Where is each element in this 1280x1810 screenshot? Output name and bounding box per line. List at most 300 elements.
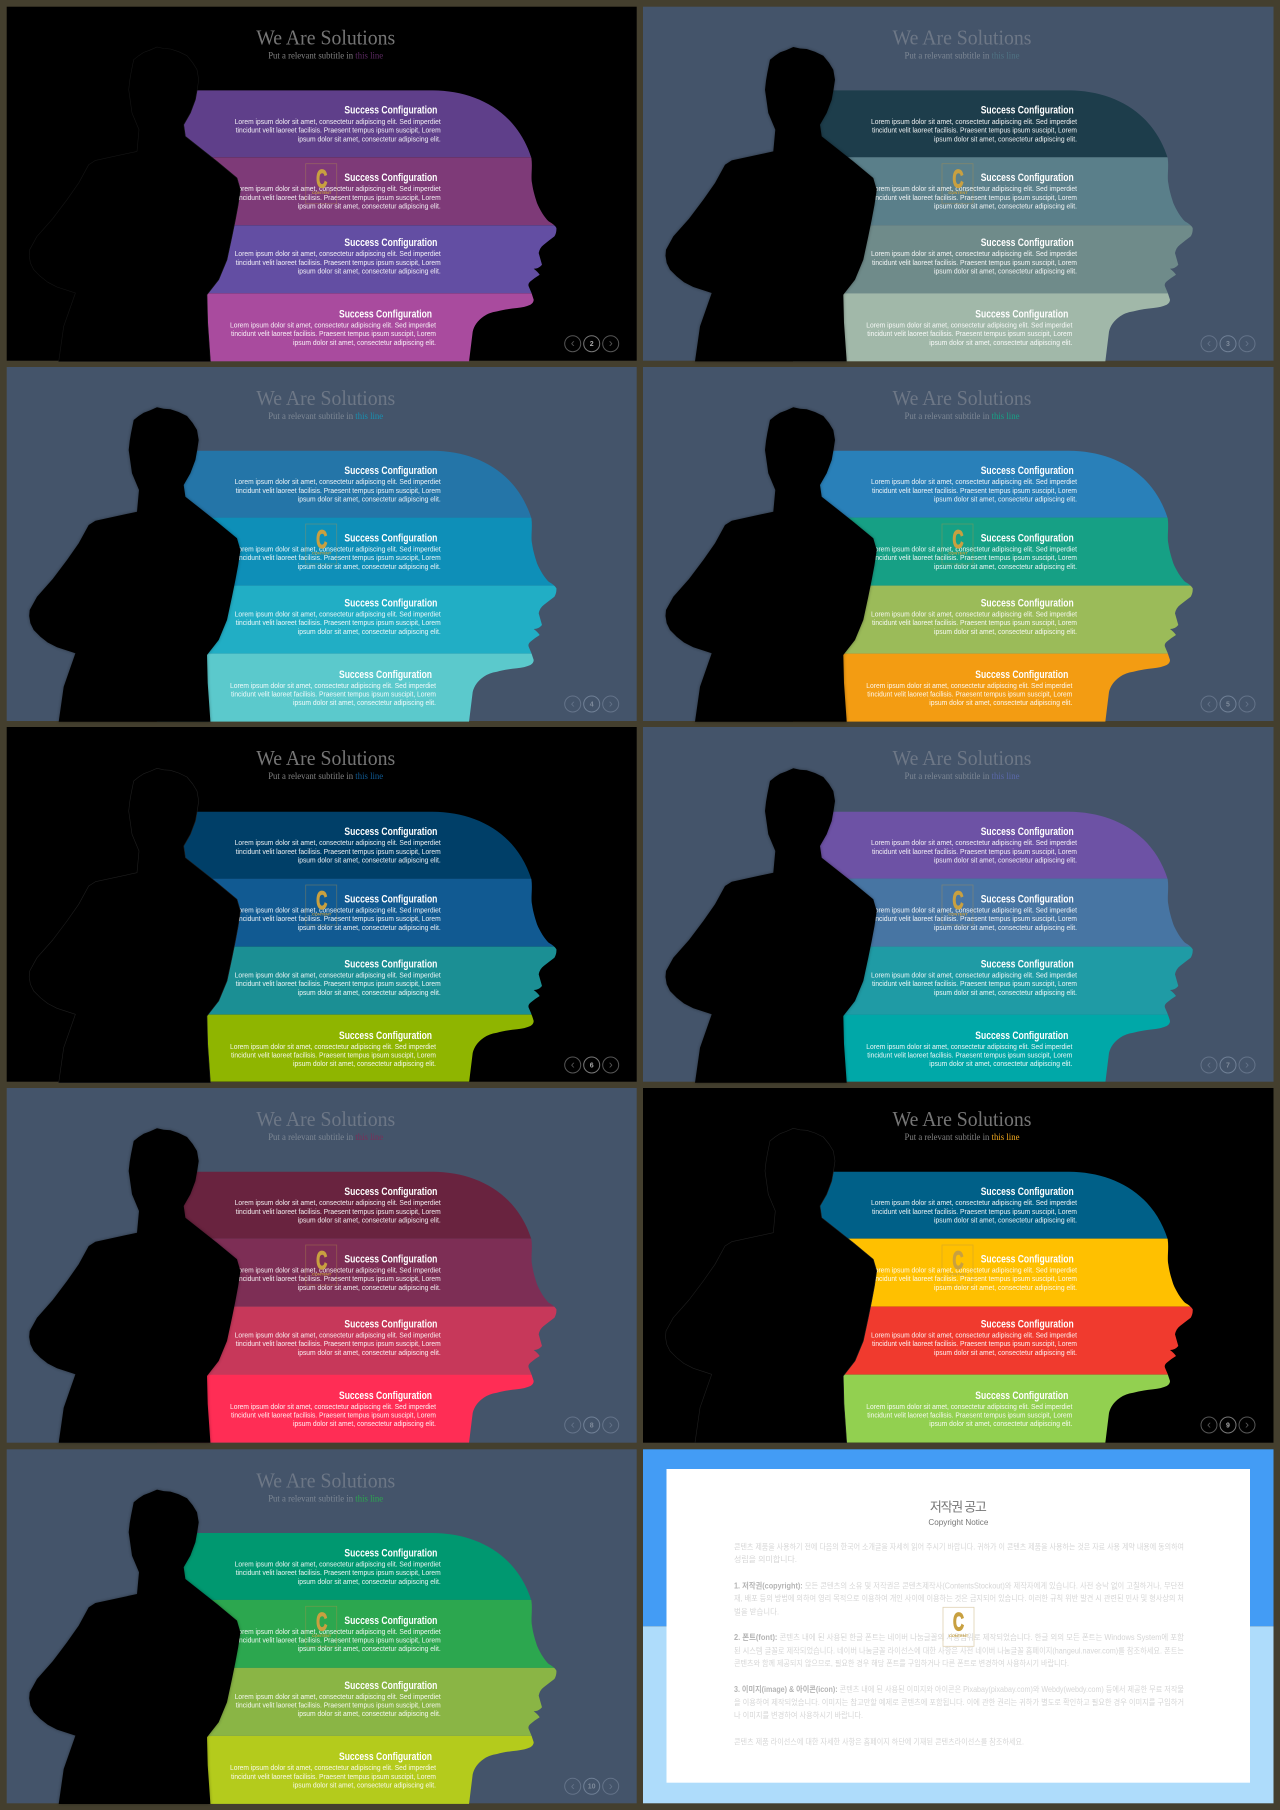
text band 3: Lorem ipsum dolor sit amet, consectetur adipiscing elit. Sed imperdiet bbox=[871, 1330, 1078, 1340]
text band 3 bbox=[235, 958, 441, 997]
text band 1: ipsum dolor sit amet, consectetur adipiscing elit. bbox=[298, 1216, 441, 1225]
text band 3: ipsum dolor sit amet, consectetur adipiscing elit. bbox=[934, 988, 1077, 997]
text band 2: ipsum dolor sit amet, consectetur adipiscing elit. bbox=[298, 923, 441, 932]
copyright body text: 성립을 의미합니다. bbox=[734, 1554, 797, 1564]
text band 1: ipsum dolor sit amet, consectetur adipiscing elit. bbox=[934, 1216, 1077, 1225]
title: We Are Solutions bbox=[892, 1107, 1032, 1131]
pagination bbox=[565, 1778, 619, 1794]
man silhouette bbox=[666, 47, 877, 361]
text band 3: Lorem ipsum dolor sit amet, consectetur adipiscing elit. Sed imperdiet bbox=[235, 1692, 441, 1701]
text band 4: tincidunt velit laoreet facilisis. Praesent tempus ipsum suscipit, Lorem bbox=[231, 1772, 436, 1781]
title: We Are Solutions bbox=[892, 386, 1032, 410]
text band 2: Lorem ipsum dolor sit amet, consectetur adipiscing elit. Sed imperdiet bbox=[871, 184, 1078, 193]
title: We Are Solutions bbox=[256, 1468, 395, 1492]
text band 2: Lorem ipsum dolor sit amet, consectetur adipiscing elit. Sed imperdiet bbox=[871, 1266, 1078, 1274]
text band 3: Success Configuration bbox=[344, 237, 437, 249]
text band 3: tincidunt velit laoreet facilisis. Praesent tempus ipsum suscipit, Lorem bbox=[872, 979, 1077, 988]
pagination bbox=[565, 1417, 619, 1433]
text band 4: Success Configuration bbox=[339, 1751, 432, 1763]
pagination: ‹ bbox=[571, 696, 575, 710]
text band 2: Lorem ipsum dolor sit amet, consectetur adipiscing elit. Sed imperdiet bbox=[235, 1627, 441, 1636]
copyright body text: 2. 폰트(font): 콘텐츠 내에 된 사용된 한글 폰트는 네이버 나눔글꼴의 사용범위로 제작되었습니다. 한글 외의 모든 폰트는 Windows System에 포함 bbox=[734, 1632, 1185, 1642]
watermark: CONTENT bbox=[948, 190, 968, 195]
watermark: CONTENT bbox=[949, 1633, 969, 1638]
text band 2 bbox=[871, 1254, 1078, 1292]
man silhouette bbox=[29, 768, 240, 1083]
text band 4 bbox=[230, 308, 437, 347]
copyright body text: 된 시스템 글꼴로 제작되었습니다. 네이버 나눔글꼴 라이선스에 대한 사항은 사전 네이버 나눔글꼴 홈페이지(hangeul.naver.com)를 참조하세요. 폰트는 bbox=[734, 1646, 1184, 1656]
pagination: ‹ bbox=[1207, 696, 1211, 710]
panel: slide 5 blue green orange on slate bbox=[643, 367, 1274, 722]
panel: slide 4 blues on slate bbox=[7, 367, 637, 722]
text band 3: Success Configuration bbox=[981, 237, 1074, 249]
watermark bbox=[942, 524, 973, 564]
text band 3: Success Configuration bbox=[344, 1680, 437, 1692]
text band 1: tincidunt velit laoreet facilisis. Praesent tempus ipsum suscipit, Lorem bbox=[872, 486, 1077, 495]
text band 2 bbox=[235, 1615, 441, 1653]
text band 4: Success Configuration bbox=[975, 1390, 1068, 1402]
text band 3: ipsum dolor sit amet, consectetur adipiscing elit. bbox=[298, 988, 441, 997]
panel: slide 2 purple on black bbox=[7, 7, 637, 361]
pagination: › bbox=[1245, 1058, 1249, 1072]
title: We Are Solutions bbox=[892, 26, 1032, 50]
man silhouette bbox=[29, 1490, 240, 1804]
pagination: 10 bbox=[588, 1784, 596, 1791]
text band 2: ipsum dolor sit amet, consectetur adipiscing elit. bbox=[934, 562, 1077, 571]
text band 2: ipsum dolor sit amet, consectetur adipiscing elit. bbox=[934, 923, 1077, 932]
title: We Are Solutions bbox=[256, 746, 395, 770]
text band 1: ipsum dolor sit amet, consectetur adipiscing elit. bbox=[934, 134, 1077, 143]
text band 4: tincidunt velit laoreet facilisis. Praesent tempus ipsum suscipit, Lorem bbox=[867, 1410, 1072, 1419]
text band 1 bbox=[235, 465, 441, 504]
head infographic bbox=[157, 90, 567, 361]
watermark bbox=[306, 524, 337, 564]
subtitle: Put a relevant subtitle in this line bbox=[268, 412, 383, 422]
text band 3: Lorem ipsum dolor sit amet, consectetur adipiscing elit. Sed imperdiet bbox=[235, 610, 441, 618]
text band 4: Lorem ipsum dolor sit amet, consectetur adipiscing elit. Sed imperdiet bbox=[866, 1042, 1073, 1051]
title: We Are Solutions bbox=[256, 386, 395, 410]
pagination: 3 bbox=[1226, 341, 1230, 348]
text band 4: tincidunt velit laoreet facilisis. Praesent tempus ipsum suscipit, Lorem bbox=[231, 1050, 436, 1059]
text band 4: Lorem ipsum dolor sit amet, consectetur adipiscing elit. Sed imperdiet bbox=[866, 1402, 1073, 1411]
pagination bbox=[1201, 1057, 1255, 1073]
man silhouette bbox=[29, 47, 240, 361]
text band 2: Success Configuration bbox=[981, 172, 1074, 184]
text band 3 bbox=[871, 237, 1078, 276]
title: We Are Solutions bbox=[892, 746, 1032, 770]
watermark: C bbox=[316, 1608, 327, 1636]
text band 3: tincidunt velit laoreet facilisis. Praesent tempus ipsum suscipit, Lorem bbox=[872, 258, 1077, 267]
text band 3: Success Configuration bbox=[981, 1318, 1074, 1330]
subtitle: Put a relevant subtitle in this line bbox=[268, 1494, 383, 1504]
panel: slide 7 violet teal on slate bbox=[643, 727, 1274, 1083]
text band 4: Lorem ipsum dolor sit amet, consectetur adipiscing elit. Sed imperdiet bbox=[230, 1402, 437, 1411]
title: We Are Solutions bbox=[256, 1107, 395, 1131]
text band 1: Lorem ipsum dolor sit amet, consectetur adipiscing elit. Sed imperdiet bbox=[871, 1198, 1078, 1207]
text band 4: Success Configuration bbox=[975, 669, 1068, 681]
text band 1: tincidunt velit laoreet facilisis. Praesent tempus ipsum suscipit, Lorem bbox=[872, 126, 1077, 135]
pagination: ‹ bbox=[1207, 1058, 1211, 1072]
text band 2: tincidunt velit laoreet facilisis. Praesent tempus ipsum suscipit, Lorem bbox=[872, 193, 1077, 202]
text band 3: Lorem ipsum dolor sit amet, consectetur adipiscing elit. Sed imperdiet bbox=[235, 249, 441, 258]
text band 3 bbox=[235, 598, 441, 636]
pagination: ‹ bbox=[1207, 1418, 1211, 1432]
head infographic bbox=[157, 811, 567, 1082]
text band 4: ipsum dolor sit amet, consectetur adipiscing elit. bbox=[929, 338, 1072, 347]
pagination: 2 bbox=[590, 341, 594, 348]
text band 2: tincidunt velit laoreet facilisis. Praesent tempus ipsum suscipit, Lorem bbox=[236, 553, 441, 562]
watermark: C bbox=[316, 887, 327, 915]
head infographic bbox=[157, 1171, 567, 1443]
text band 1: Success Configuration bbox=[344, 465, 437, 477]
pagination bbox=[565, 336, 619, 352]
text band 2: Lorem ipsum dolor sit amet, consectetur adipiscing elit. Sed imperdiet bbox=[235, 906, 441, 914]
text band 2 bbox=[871, 532, 1078, 571]
text band 2: tincidunt velit laoreet facilisis. Praesent tempus ipsum suscipit, Lorem bbox=[872, 553, 1077, 562]
text band 1: Lorem ipsum dolor sit amet, consectetur adipiscing elit. Sed imperdiet bbox=[235, 117, 441, 126]
watermark: C bbox=[952, 526, 964, 554]
text band 3: Success Configuration bbox=[344, 598, 437, 610]
copyright body text: 을 이용하여 제작되었습니다. 이미지는 참고만할 예제로 콘텐츠에 포함됩니다. 이에 관한 권리는 귀하가 별도로 확인하고 필요한 경우 이미지를 구입하거 bbox=[734, 1697, 1184, 1707]
pagination: › bbox=[1245, 696, 1249, 710]
watermark: CONTENT bbox=[312, 550, 332, 556]
pagination bbox=[565, 696, 619, 712]
text band 3 bbox=[871, 598, 1078, 636]
watermark bbox=[306, 1245, 337, 1285]
subtitle: Put a relevant subtitle in this line bbox=[904, 772, 1020, 782]
head infographic bbox=[793, 811, 1203, 1082]
text band 2: ipsum dolor sit amet, consectetur adipiscing elit. bbox=[298, 202, 441, 211]
text band 1: Success Configuration bbox=[344, 105, 437, 117]
pagination: 4 bbox=[590, 701, 594, 708]
text band 4 bbox=[866, 308, 1073, 347]
text band 2: Success Configuration bbox=[344, 172, 437, 184]
text band 1: Lorem ipsum dolor sit amet, consectetur adipiscing elit. Sed imperdiet bbox=[871, 838, 1078, 847]
panel: slide 9 multicolor on black bbox=[643, 1088, 1274, 1443]
pagination bbox=[1201, 336, 1255, 352]
watermark: CONTENT bbox=[948, 1272, 968, 1276]
text band 2 bbox=[871, 894, 1078, 932]
text band 4: Success Configuration bbox=[975, 1030, 1068, 1042]
text band 3: tincidunt velit laoreet facilisis. Praesent tempus ipsum suscipit, Lorem bbox=[236, 258, 441, 267]
copyright body text: 벌을 받습니다. bbox=[734, 1606, 779, 1616]
head infographic bbox=[793, 1171, 1203, 1443]
pagination: ‹ bbox=[571, 1058, 575, 1072]
text band 3: ipsum dolor sit amet, consectetur adipiscing elit. bbox=[934, 1348, 1077, 1357]
copyright body text: 콘텐츠 제품 라이선스에 대한 자세한 사항은 홈페이지 하단에 기재된 콘텐츠라이선스를 참조하세요. bbox=[734, 1736, 1024, 1746]
text band 4 bbox=[230, 1030, 437, 1068]
text band 4: tincidunt velit laoreet facilisis. Praesent tempus ipsum suscipit, Lorem bbox=[867, 1050, 1072, 1059]
text band 3 bbox=[871, 958, 1078, 997]
text band 4 bbox=[230, 669, 437, 707]
text band 4: tincidunt velit laoreet facilisis. Praesent tempus ipsum suscipit, Lorem bbox=[867, 329, 1072, 338]
text band 4: Lorem ipsum dolor sit amet, consectetur adipiscing elit. Sed imperdiet bbox=[230, 1042, 437, 1051]
text band 2: tincidunt velit laoreet facilisis. Praesent tempus ipsum suscipit, Lorem bbox=[236, 1636, 441, 1645]
watermark: C bbox=[952, 1247, 964, 1275]
watermark: CONTENT bbox=[312, 912, 332, 916]
man silhouette bbox=[666, 1128, 877, 1443]
text band 2: Lorem ipsum dolor sit amet, consectetur adipiscing elit. Sed imperdiet bbox=[235, 1266, 441, 1274]
subtitle: Put a relevant subtitle in this line bbox=[904, 52, 1020, 62]
watermark bbox=[943, 1607, 974, 1646]
panel: slide 6 navy lime on black bbox=[7, 727, 637, 1083]
text band 3 bbox=[871, 1318, 1078, 1357]
pagination: 9 bbox=[1226, 1422, 1230, 1429]
head infographic bbox=[157, 450, 567, 722]
pagination: › bbox=[609, 1058, 613, 1072]
text band 2: Success Configuration bbox=[344, 532, 437, 544]
copyright body text bbox=[734, 1542, 1185, 1746]
text band 4: ipsum dolor sit amet, consectetur adipiscing elit. bbox=[929, 1059, 1072, 1068]
text band 3: ipsum dolor sit amet, consectetur adipiscing elit. bbox=[298, 1709, 441, 1718]
text band 1: Success Configuration bbox=[981, 105, 1074, 117]
watermark: C bbox=[953, 1608, 964, 1636]
subtitle: Put a relevant subtitle in this line bbox=[268, 1133, 383, 1143]
text band 1: ipsum dolor sit amet, consectetur adipiscing elit. bbox=[298, 495, 441, 504]
pagination: › bbox=[609, 1779, 613, 1793]
head infographic bbox=[793, 90, 1203, 361]
pagination: 8 bbox=[590, 1422, 594, 1429]
text band 3 bbox=[235, 1318, 441, 1357]
text band 2: ipsum dolor sit amet, consectetur adipiscing elit. bbox=[298, 562, 441, 571]
man silhouette bbox=[29, 407, 240, 722]
text band 4: ipsum dolor sit amet, consectetur adipiscing elit. bbox=[929, 1419, 1072, 1428]
text band 1 bbox=[871, 826, 1078, 865]
subtitle: Put a relevant subtitle in this line bbox=[904, 1133, 1020, 1143]
text band 2: Success Configuration bbox=[981, 894, 1074, 906]
text band 1 bbox=[235, 1547, 441, 1586]
text band 3 bbox=[235, 237, 441, 276]
watermark: C bbox=[316, 526, 327, 554]
man silhouette bbox=[666, 407, 877, 722]
text band 3: Lorem ipsum dolor sit amet, consectetur adipiscing elit. Sed imperdiet bbox=[235, 1330, 441, 1340]
text band 1: Success Configuration bbox=[344, 1186, 437, 1198]
text band 4: Lorem ipsum dolor sit amet, consectetur adipiscing elit. Sed imperdiet bbox=[230, 1763, 437, 1772]
text band 4 bbox=[866, 669, 1073, 707]
copyright body text: 3. 이미지(image) & 아이콘(icon): 콘텐츠 내에 된 사용된 이미지와 아이콘은 Pixabay(pixabay.com)와 Webdy(webdy.com) 등에서 제공한 무료 저작물 bbox=[734, 1684, 1184, 1694]
pagination bbox=[1201, 696, 1255, 712]
panel: copyright notice bbox=[643, 1449, 1274, 1803]
text band 2: Success Configuration bbox=[344, 1254, 437, 1266]
watermark: CONTENT bbox=[948, 912, 968, 916]
watermark: CONTENT bbox=[312, 1272, 332, 1276]
watermark: C bbox=[316, 1247, 327, 1275]
subtitle: Put a relevant subtitle in this line bbox=[268, 772, 383, 782]
text band 4: ipsum dolor sit amet, consectetur adipiscing elit. bbox=[293, 1781, 436, 1790]
text band 3: Success Configuration bbox=[344, 1318, 437, 1330]
text band 4: Lorem ipsum dolor sit amet, consectetur adipiscing elit. Sed imperdiet bbox=[230, 320, 437, 329]
text band 3 bbox=[235, 1680, 441, 1718]
text band 1: ipsum dolor sit amet, consectetur adipiscing elit. bbox=[298, 856, 441, 865]
title: We Are Solutions bbox=[256, 26, 395, 50]
text band 2: Success Configuration bbox=[981, 532, 1074, 544]
watermark bbox=[306, 164, 337, 204]
text band 4: Lorem ipsum dolor sit amet, consectetur adipiscing elit. Sed imperdiet bbox=[230, 681, 437, 690]
text band 2: tincidunt velit laoreet facilisis. Praesent tempus ipsum suscipit, Lorem bbox=[236, 914, 441, 923]
text band 1: Success Configuration bbox=[344, 826, 437, 838]
pagination: › bbox=[609, 1418, 613, 1432]
text band 3: ipsum dolor sit amet, consectetur adipiscing elit. bbox=[298, 1348, 441, 1357]
watermark: CONTENT bbox=[312, 190, 332, 195]
text band 3: ipsum dolor sit amet, consectetur adipiscing elit. bbox=[934, 627, 1077, 636]
text band 3: Lorem ipsum dolor sit amet, consectetur adipiscing elit. Sed imperdiet bbox=[871, 610, 1078, 618]
text band 4: tincidunt velit laoreet facilisis. Praesent tempus ipsum suscipit, Lorem bbox=[231, 689, 436, 698]
text band 4: Lorem ipsum dolor sit amet, consectetur adipiscing elit. Sed imperdiet bbox=[866, 681, 1073, 690]
watermark bbox=[306, 885, 337, 925]
text band 2 bbox=[871, 172, 1078, 211]
panel: slide 3 teal-grey on slate bbox=[643, 7, 1274, 361]
text band 1: tincidunt velit laoreet facilisis. Praesent tempus ipsum suscipit, Lorem bbox=[236, 847, 441, 856]
text band 3: ipsum dolor sit amet, consectetur adipiscing elit. bbox=[934, 267, 1077, 276]
text band 1: ipsum dolor sit amet, consectetur adipiscing elit. bbox=[934, 495, 1077, 504]
text band 2: Success Configuration bbox=[981, 1254, 1074, 1266]
panel: slide 8 maroon red on slate bbox=[7, 1088, 637, 1443]
text band 3: Success Configuration bbox=[981, 598, 1074, 610]
copyright body text: 재, 배포 등의 방법에 의하여 영리 목적으로 이용하여 개인 사이에 이용하는 것은 금지되어 있습니다. 이러한 규칙 위반 발견 시 관련된 민사 및 형사상의 처 bbox=[734, 1593, 1184, 1603]
text band 1: Lorem ipsum dolor sit amet, consectetur adipiscing elit. Sed imperdiet bbox=[235, 1560, 441, 1569]
text band 3: Success Configuration bbox=[344, 958, 437, 970]
watermark bbox=[942, 164, 973, 204]
text band 4: Success Configuration bbox=[975, 308, 1068, 320]
text band 3: tincidunt velit laoreet facilisis. Praesent tempus ipsum suscipit, Lorem bbox=[236, 1701, 441, 1710]
pagination: › bbox=[1245, 336, 1249, 350]
watermark: C bbox=[952, 166, 964, 194]
text band 2: Lorem ipsum dolor sit amet, consectetur adipiscing elit. Sed imperdiet bbox=[871, 906, 1078, 914]
text band 4: tincidunt velit laoreet facilisis. Praesent tempus ipsum suscipit, Lorem bbox=[231, 1410, 436, 1419]
text band 2: ipsum dolor sit amet, consectetur adipiscing elit. bbox=[298, 1283, 441, 1292]
text band 1: ipsum dolor sit amet, consectetur adipiscing elit. bbox=[298, 134, 441, 143]
pagination: ‹ bbox=[571, 1418, 575, 1432]
text band 1: tincidunt velit laoreet facilisis. Praesent tempus ipsum suscipit, Lorem bbox=[236, 1207, 441, 1216]
text band 1: tincidunt velit laoreet facilisis. Praesent tempus ipsum suscipit, Lorem bbox=[236, 126, 441, 135]
text band 2: ipsum dolor sit amet, consectetur adipiscing elit. bbox=[934, 1283, 1077, 1292]
pagination: › bbox=[609, 696, 613, 710]
pagination: › bbox=[1245, 1418, 1249, 1432]
text band 1 bbox=[871, 105, 1078, 143]
copyright body text: 나 이미지를 변경하여 사용하시기 바랍니다. bbox=[734, 1710, 863, 1720]
pagination: ‹ bbox=[571, 1779, 575, 1793]
pagination bbox=[1201, 1417, 1255, 1433]
text band 2: tincidunt velit laoreet facilisis. Praesent tempus ipsum suscipit, Lorem bbox=[872, 914, 1077, 923]
text band 1: Lorem ipsum dolor sit amet, consectetur adipiscing elit. Sed imperdiet bbox=[235, 1198, 441, 1207]
text band 1: ipsum dolor sit amet, consectetur adipiscing elit. bbox=[934, 856, 1077, 865]
subtitle: Put a relevant subtitle in this line bbox=[268, 52, 383, 62]
text band 2: ipsum dolor sit amet, consectetur adipiscing elit. bbox=[298, 1644, 441, 1653]
pagination bbox=[565, 1057, 619, 1073]
text band 4: tincidunt velit laoreet facilisis. Praesent tempus ipsum suscipit, Lorem bbox=[867, 689, 1072, 698]
man silhouette bbox=[666, 768, 877, 1083]
text band 1 bbox=[871, 465, 1078, 504]
watermark bbox=[942, 885, 973, 925]
subtitle: Put a relevant subtitle in this line bbox=[904, 412, 1020, 422]
text band 4: tincidunt velit laoreet facilisis. Praesent tempus ipsum suscipit, Lorem bbox=[231, 329, 436, 338]
copyright body text: 콘텐츠 제품을 사용하기 전에 다음의 한국어 소개글을 자세히 읽어 주시기 바랍니다. 귀하가 이 콘텐츠 제품을 사용하는 것은 자료 사용 계약 내용에 동의하여 bbox=[734, 1542, 1184, 1552]
head infographic bbox=[157, 1532, 567, 1804]
watermark: CONTENT bbox=[312, 1633, 332, 1638]
text band 4: ipsum dolor sit amet, consectetur adipiscing elit. bbox=[293, 1419, 436, 1428]
text band 2: Success Configuration bbox=[344, 894, 437, 906]
pagination: 7 bbox=[1226, 1062, 1230, 1069]
text band 2: Success Configuration bbox=[344, 1615, 437, 1627]
text band 4: Success Configuration bbox=[339, 1390, 432, 1402]
copyright body text: 1. 저작권(copyright): 모든 콘텐츠의 소유 및 저작권은 콘텐츠제작사(ContentsStockout)와 제작자에게 있습니다. 사전 승낙 없이 고칠하거나, 무단전 bbox=[734, 1580, 1184, 1590]
text band 3: tincidunt velit laoreet facilisis. Praesent tempus ipsum suscipit, Lorem bbox=[872, 618, 1077, 627]
copyright body text: 콘텐츠와 함께 제공되지 않으므로, 필요한 경우 해당 폰트를 구입하거나 다른 폰트로 변경하여 사용하시기 바랍니다. bbox=[734, 1658, 1069, 1668]
head infographic bbox=[793, 450, 1203, 722]
panel: slide 10 greens on slate bbox=[7, 1449, 637, 1804]
text band 1 bbox=[871, 1186, 1078, 1225]
pagination: › bbox=[609, 336, 613, 350]
text band 4: ipsum dolor sit amet, consectetur adipiscing elit. bbox=[293, 698, 436, 707]
text band 2: tincidunt velit laoreet facilisis. Praesent tempus ipsum suscipit, Lorem bbox=[236, 193, 441, 202]
text band 1: Lorem ipsum dolor sit amet, consectetur adipiscing elit. Sed imperdiet bbox=[871, 477, 1078, 486]
text band 2 bbox=[235, 894, 441, 932]
text band 4: ipsum dolor sit amet, consectetur adipiscing elit. bbox=[293, 338, 436, 347]
text band 2 bbox=[235, 532, 441, 571]
pagination: 5 bbox=[1226, 701, 1230, 708]
text band 3: ipsum dolor sit amet, consectetur adipiscing elit. bbox=[298, 267, 441, 276]
text band 3: tincidunt velit laoreet facilisis. Praesent tempus ipsum suscipit, Lorem bbox=[872, 1339, 1077, 1348]
text band 1: tincidunt velit laoreet facilisis. Praesent tempus ipsum suscipit, Lorem bbox=[236, 1568, 441, 1577]
text band 1: Lorem ipsum dolor sit amet, consectetur adipiscing elit. Sed imperdiet bbox=[871, 117, 1078, 126]
copyright subheading: Copyright Notice bbox=[928, 1517, 989, 1527]
text band 1 bbox=[235, 105, 441, 143]
text band 1: Lorem ipsum dolor sit amet, consectetur adipiscing elit. Sed imperdiet bbox=[235, 477, 441, 486]
text band 2: tincidunt velit laoreet facilisis. Praesent tempus ipsum suscipit, Lorem bbox=[872, 1274, 1077, 1283]
text band 1: tincidunt velit laoreet facilisis. Praesent tempus ipsum suscipit, Lorem bbox=[236, 486, 441, 495]
text band 4 bbox=[866, 1390, 1073, 1428]
text band 1: Success Configuration bbox=[981, 826, 1074, 838]
text band 3: Lorem ipsum dolor sit amet, consectetur adipiscing elit. Sed imperdiet bbox=[871, 249, 1078, 258]
text band 1: Lorem ipsum dolor sit amet, consectetur adipiscing elit. Sed imperdiet bbox=[235, 838, 441, 847]
text band 2: Lorem ipsum dolor sit amet, consectetur adipiscing elit. Sed imperdiet bbox=[871, 544, 1078, 554]
watermark: C bbox=[952, 887, 964, 915]
text band 4: Lorem ipsum dolor sit amet, consectetur adipiscing elit. Sed imperdiet bbox=[866, 320, 1073, 329]
text band 1 bbox=[235, 1186, 441, 1225]
pagination: 6 bbox=[590, 1062, 594, 1069]
text band 1: ipsum dolor sit amet, consectetur adipiscing elit. bbox=[298, 1577, 441, 1586]
text band 4: ipsum dolor sit amet, consectetur adipiscing elit. bbox=[929, 698, 1072, 707]
text band 4 bbox=[866, 1030, 1073, 1068]
text band 3: Lorem ipsum dolor sit amet, consectetur adipiscing elit. Sed imperdiet bbox=[235, 970, 441, 980]
pagination: ‹ bbox=[571, 336, 575, 350]
watermark bbox=[306, 1606, 337, 1646]
text band 4: Success Configuration bbox=[339, 308, 432, 320]
text band 4 bbox=[230, 1390, 437, 1428]
text band 2: tincidunt velit laoreet facilisis. Praesent tempus ipsum suscipit, Lorem bbox=[236, 1274, 441, 1283]
text band 3: Lorem ipsum dolor sit amet, consectetur adipiscing elit. Sed imperdiet bbox=[871, 970, 1078, 980]
man silhouette bbox=[29, 1128, 240, 1443]
text band 1: Success Configuration bbox=[981, 1186, 1074, 1198]
text band 3: tincidunt velit laoreet facilisis. Praesent tempus ipsum suscipit, Lorem bbox=[236, 1339, 441, 1348]
text band 4: Success Configuration bbox=[339, 1030, 432, 1042]
text band 2: Lorem ipsum dolor sit amet, consectetur adipiscing elit. Sed imperdiet bbox=[235, 184, 441, 193]
text band 1: Success Configuration bbox=[344, 1547, 437, 1559]
watermark: CONTENT bbox=[948, 550, 968, 556]
text band 4: ipsum dolor sit amet, consectetur adipiscing elit. bbox=[293, 1059, 436, 1068]
text band 3: tincidunt velit laoreet facilisis. Praesent tempus ipsum suscipit, Lorem bbox=[236, 618, 441, 627]
text band 2 bbox=[235, 1254, 441, 1292]
text band 3: ipsum dolor sit amet, consectetur adipiscing elit. bbox=[298, 627, 441, 636]
text band 3: Success Configuration bbox=[981, 958, 1074, 970]
watermark bbox=[942, 1245, 973, 1285]
text band 1: tincidunt velit laoreet facilisis. Praesent tempus ipsum suscipit, Lorem bbox=[872, 847, 1077, 856]
text band 4: Success Configuration bbox=[339, 669, 432, 681]
text band 4 bbox=[230, 1751, 437, 1790]
copyright heading: 저작권 공고 bbox=[930, 1500, 987, 1514]
text band 1 bbox=[235, 826, 441, 865]
text band 2: Lorem ipsum dolor sit amet, consectetur adipiscing elit. Sed imperdiet bbox=[235, 544, 441, 554]
